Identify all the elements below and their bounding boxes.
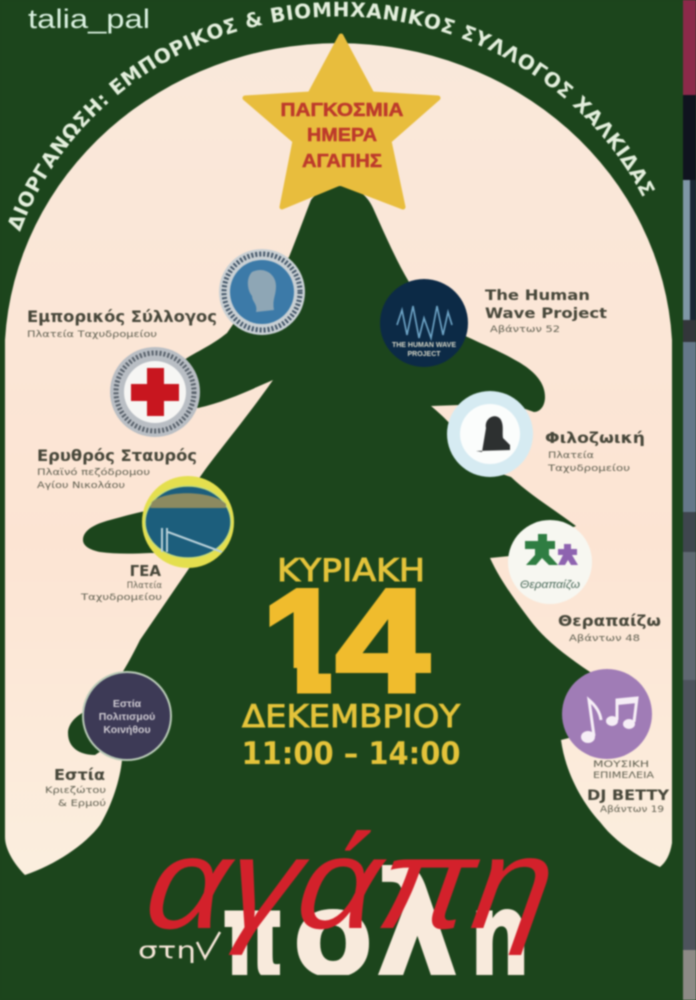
label: Emporikos Syllogos: [27, 308, 217, 340]
date: time: 11:00 – 14:00: [242, 736, 460, 772]
label: Estia: & Ερμού: [58, 798, 106, 809]
label: Estia: Εστία: [54, 766, 105, 784]
curved organiser heading: ΔΙΟΡΓΑΝΩΣΗ: ΕΜΠΟΡΙΚΟΣ & ΒΙΟΜΗΧΑΝΙΚΟΣ ΣΥΛΛΟΓΟΣ ΧΑΛΚΙΔΑΣ: [8, 0, 656, 232]
word: agapi: αγάπη: [138, 811, 564, 956]
label: music curation DJ Betty: [587, 760, 670, 815]
label: music curation DJ Betty: Αβάντων 19: [600, 805, 664, 815]
date: day number: 1: [262, 559, 343, 722]
logo: GEA: [142, 476, 234, 568]
logo: Estia: Κοινήθου: [103, 724, 151, 736]
label: Therapaizo: [558, 612, 661, 644]
label: Emporikos Syllogos: Εμπορικός Σύλλογος: [27, 308, 217, 326]
label: The Human Wave Project: Αβάντων 52: [490, 325, 560, 335]
green Christmas tree: [25, 186, 664, 900]
logo: The Human Wave Project: PROJECT: [407, 351, 441, 358]
label: Estia: [45, 766, 106, 809]
logo: Therapaizo: Θεραπαίζω: [520, 579, 580, 591]
label: GEA: Πλατεία: [127, 581, 162, 591]
label: The Human Wave Project: [485, 288, 607, 335]
date: day number: [268, 587, 432, 694]
date: day number: 4: [336, 559, 429, 722]
label: Filozoiki: Φιλοζωική: [545, 429, 645, 447]
label: GEA: Ταχυδρομείου: [80, 593, 162, 603]
label: GEA: ΓΕΑ: [130, 562, 161, 580]
label: music curation DJ Betty: ΜΟΥΣΙΚΗ: [593, 760, 649, 770]
logo: The Human Wave Project: THE HUMAN WAVE: [392, 342, 456, 349]
label: GEA: [80, 562, 162, 603]
date: month: ΔΕΚΕΜΒΡΙΟΥ: [242, 699, 460, 735]
star title text: ΗΜΕΡΑ: [307, 125, 377, 145]
star title text: ΑΓΑΠΗΣ: [302, 151, 382, 171]
logo: The Human Wave Project: [380, 279, 468, 367]
campaign logo: agapi stin poli: [138, 829, 550, 976]
word: poli: η: [470, 868, 530, 1000]
label: The Human Wave Project: The Human: [485, 288, 590, 304]
label: The Human Wave Project: Wave Project: [485, 306, 607, 322]
label: Estia: Κριεζώτου: [45, 785, 106, 796]
logo: Estia: Εστία: [113, 698, 142, 710]
account watermark: talia_pal: [28, 4, 150, 34]
star title text: ΠΑΓΚΟΣΜΙΑ: [280, 100, 404, 120]
label: Erythros Stavros: [37, 447, 197, 491]
word: stin: στη: [138, 938, 196, 964]
label: music curation DJ Betty: ΕΠΙΜΕΛΕΙΑ: [593, 771, 654, 781]
logo: Red Cross: [110, 347, 200, 437]
word: poli: π: [222, 868, 284, 1000]
star title text: [280, 100, 404, 171]
word: poli: [224, 864, 526, 976]
logo: Estia: Πολιτισμού: [99, 711, 155, 723]
logo: Emporikos Syllogos: [219, 249, 305, 335]
logo: Filozoiki: [447, 391, 533, 477]
label: Therapaizo: Θεραπαίζω: [558, 612, 661, 630]
photo strip: right edge background: [683, 0, 696, 1000]
date: weekday: ΚΥΡΙΑΚΗ: [277, 553, 425, 589]
cream arch panel: [5, 43, 672, 875]
label: Filozoiki: [545, 429, 645, 474]
label: Filozoiki: Πλατεία: [548, 451, 595, 461]
logo: music notes: [562, 669, 652, 759]
star with title: [245, 36, 438, 207]
label: Erythros Stavros: Αγίου Νικολάου: [37, 481, 125, 491]
word: poli: ο: [293, 868, 373, 1000]
label: Erythros Stavros: Πλαϊνό πεζόδρομου: [37, 467, 150, 478]
label: music curation DJ Betty: DJ BETTY: [587, 788, 670, 804]
logo: Therapaizo: [508, 520, 592, 604]
label: Erythros Stavros: Ερυθρός Σταυρός: [37, 447, 197, 465]
label: Therapaizo: Αβάντων 48: [569, 634, 640, 644]
word: stin: [138, 932, 220, 964]
logo: Estia: [83, 672, 171, 760]
label: Emporikos Syllogos: Πλατεία Ταχυδρομείου: [27, 330, 157, 340]
label: Filozoiki: Ταχυδρομείου: [547, 464, 630, 474]
